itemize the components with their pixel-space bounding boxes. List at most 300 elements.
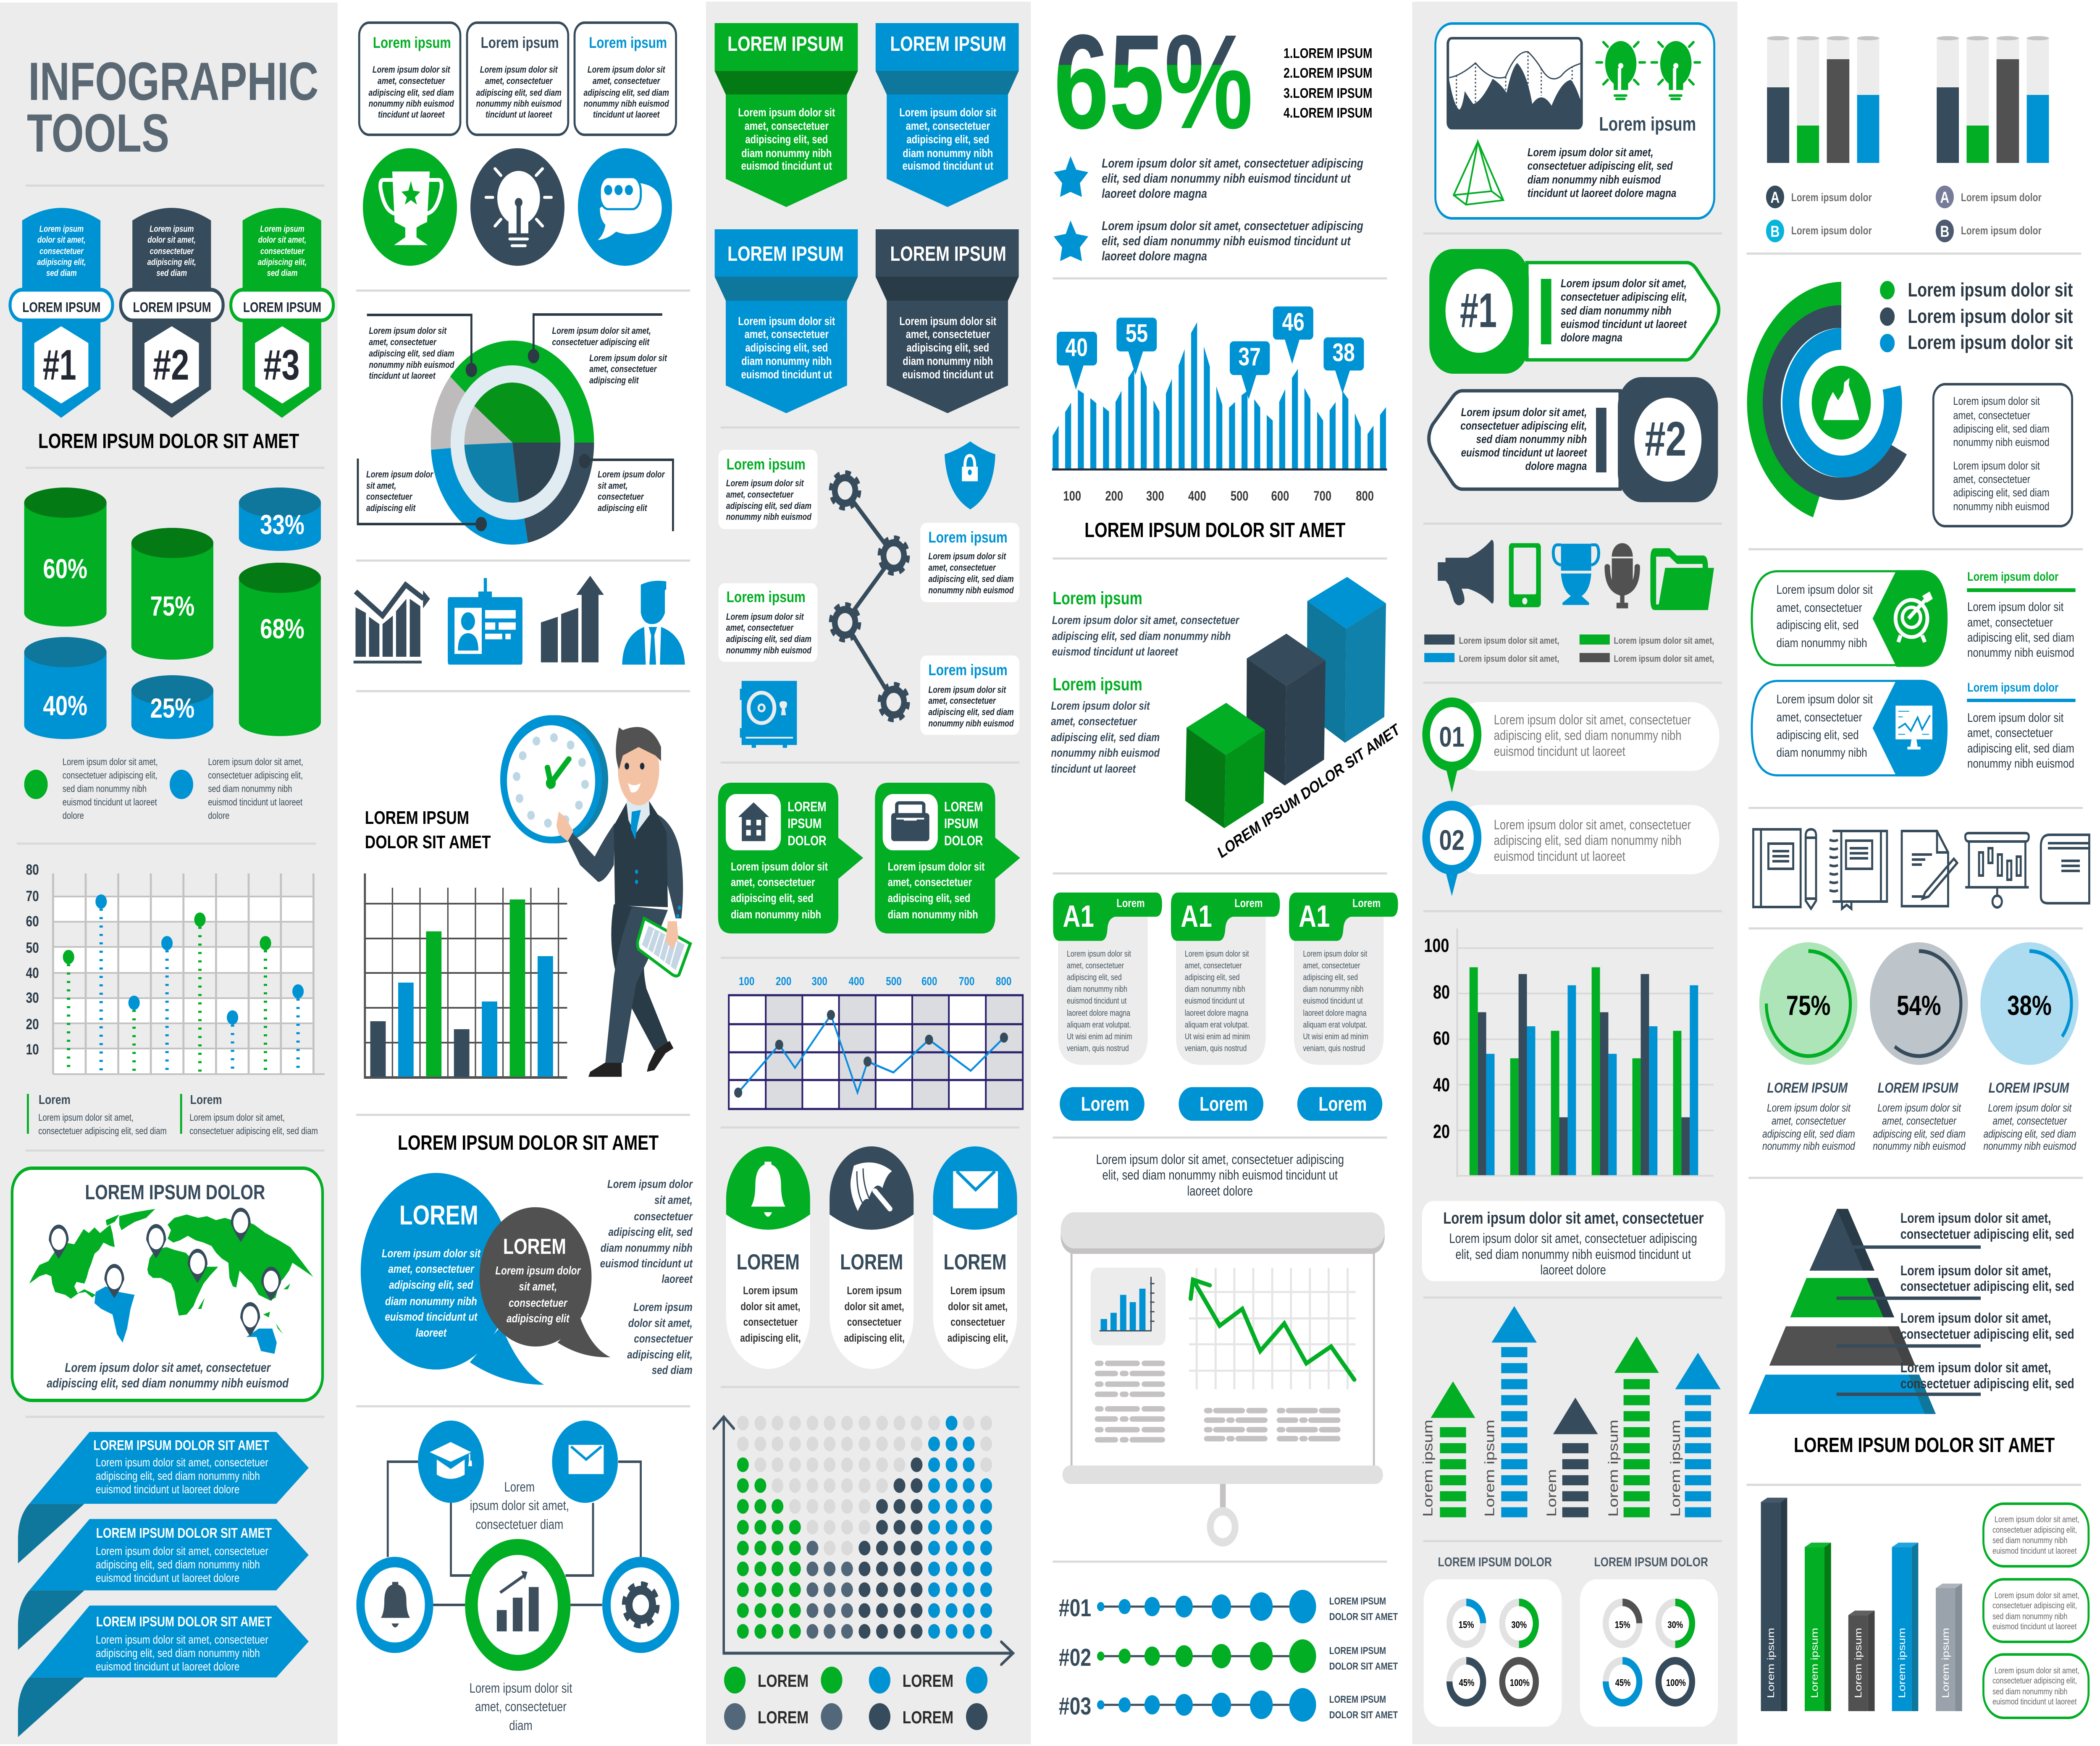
- progress gauges: 38%: [2007, 990, 2052, 1021]
- pin row 02: Lorem ipsum dolor sit amet, consectetuer: [1494, 818, 1691, 833]
- grouped bar chart: 80: [1433, 981, 1450, 1003]
- A1 cards: amet, consectetuer: [1303, 961, 1360, 970]
- heading: lorem ipsum dolor sit amet: DOLOR SIT AMET: [365, 832, 491, 852]
- A B legend: [1766, 186, 2042, 242]
- text blocks beside cubes: Lorem ipsum: [1053, 674, 1142, 695]
- cylinder legend: sed diam nonummy nibh: [208, 784, 292, 794]
- text box 1: tincidunt ut laoreet: [378, 110, 445, 120]
- chart legend: Lorem ipsum dolor sit amet,: [189, 1112, 285, 1123]
- speech bubbles: LOREM: [503, 1234, 566, 1258]
- gear process: amet, consectetuer: [928, 696, 996, 706]
- spike chart: 800: [1356, 489, 1374, 504]
- text box 1: adipiscing elit, sed diam: [369, 88, 454, 98]
- right-aligned text: adipiscing elit,: [627, 1348, 693, 1361]
- panel: world map: LOREM IPSUM DOLOR: [85, 1181, 265, 1204]
- ring gauges: 100%: [1666, 1678, 1686, 1688]
- line chart: [729, 975, 1023, 1109]
- gear process: Lorem ipsum: [727, 456, 806, 473]
- icon row legend: Lorem ipsum dolor sit amet,: [1614, 636, 1714, 646]
- green text pills: sed diam nonummy nibh: [1992, 1686, 2068, 1696]
- panel: mountains and bulbs: Lorem ipsum: [1599, 113, 1696, 135]
- 3d bar chart: [1761, 1498, 1962, 1711]
- target and monitor pills: amet, consectetuer: [1777, 710, 1862, 724]
- cylinder chart: [24, 488, 321, 739]
- stars and text: Lorem ipsum dolor sit amet, consectetuer adipiscing: [1102, 156, 1363, 170]
- speech bubbles: sit amet,: [519, 1280, 557, 1293]
- right-aligned text: dolor sit amet,: [628, 1317, 693, 1330]
- timeline dots: LOREM IPSUM: [1329, 1645, 1386, 1657]
- icon network: Lorem ipsum dolor sit: [470, 1681, 572, 1696]
- badge 3: Lorem ipsum: [260, 224, 304, 234]
- A1 cards: Lorem: [1200, 1093, 1248, 1115]
- badge 3: dolor sit amet,: [258, 235, 306, 245]
- A1 cards: amet, consectetuer: [1067, 961, 1124, 970]
- spike chart: 55: [1126, 319, 1148, 347]
- badge 2: adipiscing elit,: [147, 257, 196, 267]
- banners: amet, consectetuer: [745, 328, 829, 341]
- ring gauges: 30%: [1667, 1620, 1683, 1631]
- pyramid: consectetuer adipiscing elit, sed: [1900, 1376, 2074, 1392]
- text box 2: amet, consectetuer: [485, 76, 553, 87]
- pyramid: [1748, 1209, 2074, 1414]
- ribbon arrows: euismod tincidunt ut laoreet dolore: [96, 1572, 239, 1585]
- badge 1: [10, 208, 113, 418]
- pin row 01: adipiscing elit, sed diam nonummy nibh: [1494, 728, 1681, 743]
- icon network: Lorem: [504, 1480, 535, 1495]
- green callout cards: DOLOR: [788, 834, 827, 849]
- right-aligned text: Lorem ipsum: [633, 1301, 693, 1314]
- paragraph above screen: Lorem ipsum dolor sit amet, consectetuer adipiscing: [1096, 1152, 1344, 1167]
- cylinder chart: 33%: [260, 509, 304, 540]
- banners: LOREM IPSUM: [890, 243, 1006, 265]
- speech bubbles: amet, consectetuer: [388, 1263, 475, 1276]
- lollipop chart: 20: [26, 1016, 39, 1033]
- green callout cards: IPSUM: [944, 816, 978, 831]
- icon row: megaphone, phone, cup, mic, folder: [1438, 540, 1714, 610]
- spike chart: [1052, 307, 1387, 504]
- ribbon arrows: euismod tincidunt ut laoreet dolore: [96, 1483, 239, 1496]
- green text pills: euismod tincidunt ut laoreet: [1992, 1546, 2077, 1555]
- dot matrix legend: [724, 1667, 987, 1730]
- pyramid: consectetuer adipiscing elit, sed: [1900, 1327, 2074, 1342]
- line chart: 200: [776, 975, 791, 988]
- target and monitor pills: Lorem ipsum dolor sit: [1777, 582, 1873, 597]
- gear process: nonummy nibh euismod: [928, 718, 1014, 729]
- A1 cards: diam nonummy nibh: [1067, 984, 1127, 994]
- chart legend: consectetuer adipiscing elit, sed diam: [189, 1126, 318, 1137]
- banners: diam nonummy nibh: [903, 147, 993, 160]
- panel: column 1: [10, 51, 333, 1737]
- speech bubbles: LOREM: [399, 1201, 478, 1230]
- numbered list: 1.LOREM IPSUM: [1284, 46, 1372, 61]
- text box 3: amet, consectetuer: [593, 76, 660, 87]
- banners: amet, consectetuer: [745, 120, 829, 133]
- donut chart: amet, consectetuer: [589, 364, 657, 375]
- green text pills: [1983, 1504, 2089, 1718]
- lollipop chart: 40: [26, 965, 39, 981]
- stacked arrows: Lorem ipsum: [1482, 1420, 1497, 1517]
- target and monitor pills: diam nonummy nibh: [1777, 745, 1867, 760]
- green text pills: sed diam nonummy nibh: [1992, 1611, 2068, 1621]
- banners: adipiscing elit, sed: [906, 133, 989, 146]
- lollipop chart: [26, 861, 325, 1074]
- gear process: Lorem ipsum: [727, 588, 806, 606]
- badge 1: adipiscing elit,: [37, 257, 86, 267]
- panel: mountains and bulbs: Lorem ipsum dolor sit amet,: [1528, 146, 1654, 159]
- green callout cards: adipiscing elit, sed: [888, 892, 970, 905]
- right-aligned text: consectetuer: [634, 1210, 693, 1223]
- number card 2: dolore magna: [1525, 460, 1587, 473]
- spike chart: 400: [1188, 489, 1206, 504]
- A1 cards: Ut wisi enim ad minim: [1067, 1032, 1132, 1041]
- gear process: adipiscing elit, sed diam: [928, 707, 1014, 718]
- green text pills: consectetuer adipiscing elit,: [1992, 1600, 2077, 1610]
- A1 cards: aliquam erat volutpat.: [1185, 1020, 1249, 1029]
- pin row 01: [1422, 697, 1719, 793]
- grouped bar chart: 60: [1433, 1028, 1450, 1049]
- radial legend: [1880, 279, 2073, 353]
- gear process: amet, consectetuer: [726, 490, 794, 500]
- capsule cards: LOREM: [840, 1250, 903, 1274]
- outlined text box: nonummy nibh euismod: [1953, 436, 2050, 449]
- 3d cubes: [1185, 577, 1386, 828]
- text blocks beside cubes: Lorem ipsum dolor sit amet, consectetuer: [1052, 614, 1240, 627]
- gear process: Lorem ipsum dolor sit: [726, 612, 804, 622]
- outlined text box: Lorem ipsum dolor sit: [1953, 395, 2040, 408]
- target and monitor pills: diam nonummy nibh: [1777, 635, 1867, 650]
- badge 3: LOREM IPSUM: [243, 300, 321, 315]
- badge 2: consectetuer: [150, 246, 194, 257]
- donut chart: Lorem ipsum dolor sit amet,: [552, 326, 651, 336]
- ribbon arrows: adipiscing elit, sed diam nonummy nibh: [96, 1470, 260, 1483]
- number card 1: sed diam nonummy nibh: [1561, 304, 1672, 317]
- cylinder chart: 68%: [260, 613, 304, 644]
- stars and text: laoreet dolore magna: [1102, 249, 1207, 263]
- title: INFOGRAPHIC: [28, 51, 318, 112]
- text box 3: nonummy nibh euismod: [584, 99, 669, 109]
- A1 cards: Lorem: [1234, 897, 1263, 910]
- donut chart: tincidunt ut laoreet: [369, 371, 436, 381]
- banners: adipiscing elit, sed: [906, 341, 989, 354]
- number card 2: euismod tincidunt ut laoreet: [1461, 446, 1588, 459]
- right-aligned text: adipiscing elit, sed: [608, 1226, 693, 1239]
- banners: Lorem ipsum dolor sit: [738, 315, 835, 328]
- outlined text box: amet, consectetuer: [1953, 409, 2030, 422]
- text box 3: Lorem ipsum dolor sit: [588, 65, 666, 75]
- badge 1: consectetuer: [39, 246, 84, 257]
- text box 2: nonummy nibh euismod: [476, 99, 562, 109]
- paragraph above screen: elit, sed diam nonummy nibh euismod tincidunt ut: [1102, 1168, 1338, 1183]
- banners: diam nonummy nibh: [741, 147, 832, 160]
- dot matrix legend: LOREM: [903, 1672, 953, 1691]
- panel: world map: adipiscing elit, sed diam nonummy nibh euismod: [47, 1376, 289, 1390]
- spike chart: 500: [1231, 489, 1249, 504]
- speech bubbles: adipiscing elit: [507, 1312, 570, 1325]
- title: TOOLS: [27, 103, 169, 163]
- stacked arrows: Lorem: [1544, 1469, 1559, 1517]
- outlined text box: adipiscing elit, sed diam: [1953, 487, 2050, 499]
- stacked arrows: Lorem ipsum: [1420, 1420, 1435, 1517]
- projector screen: [1061, 1212, 1385, 1542]
- cylinder legend: sed diam nonummy nibh: [63, 784, 147, 794]
- line chart: 700: [959, 975, 974, 988]
- timeline dots: DOLOR SIT AMET: [1329, 1709, 1398, 1721]
- speech bubbles: euismod tincidunt ut: [385, 1311, 478, 1324]
- badge 2: sed diam: [156, 268, 187, 278]
- green text pills: Lorem ipsum dolor sit amet,: [1995, 1514, 2079, 1524]
- 3d bar chart: Lorem ipsum: [1765, 1628, 1776, 1698]
- side text blocks: Lorem ipsum dolor: [1967, 569, 2059, 584]
- A1 cards: Lorem: [1116, 897, 1145, 910]
- text box 2: adipiscing elit, sed diam: [476, 88, 562, 98]
- 3d bar chart: Lorem ipsum: [1809, 1628, 1820, 1698]
- line icon row: [1753, 829, 2089, 909]
- green callout cards: Lorem ipsum dolor sit: [731, 860, 828, 873]
- cylinder chart: 60%: [43, 553, 87, 584]
- cylinder legend: consectetuer adipiscing elit,: [63, 770, 158, 781]
- ribbon arrows: adipiscing elit, sed diam nonummy nibh: [96, 1647, 260, 1660]
- icon row: chart, id card, growth, person: [354, 576, 685, 665]
- panel: mountains and bulbs: diam nonummy nibh euismod: [1528, 173, 1661, 186]
- text blocks beside cubes: euismod tincidunt ut laoreet: [1052, 645, 1179, 658]
- speech bubbles: diam nonummy nibh: [385, 1295, 477, 1308]
- line chart: 400: [849, 975, 864, 988]
- number card 2: [1429, 377, 1718, 502]
- donut chart: consectetuer adipiscing elit: [552, 337, 650, 348]
- stars and text: [1054, 156, 1363, 263]
- A1 cards: diam nonummy nibh: [1185, 984, 1245, 994]
- green callout cards: diam nonummy nibh: [731, 908, 821, 921]
- timeline dots: DOLOR SIT AMET: [1329, 1611, 1398, 1623]
- badge 2: dolor sit amet,: [147, 235, 196, 245]
- panel: column 5: [1420, 24, 1725, 1727]
- caption card: Lorem ipsum dolor sit amet, consectetuer adipiscing: [1449, 1231, 1697, 1246]
- spike chart: 38: [1333, 338, 1355, 367]
- progress gauges: nonummy nibh euismod: [1873, 1140, 1966, 1152]
- pin row 02: 02: [1439, 824, 1465, 856]
- icon row legend: Lorem ipsum dolor sit amet,: [1459, 654, 1559, 664]
- A1 cards: laoreet dolore magna: [1067, 1008, 1131, 1017]
- spike chart: 37: [1239, 343, 1261, 371]
- numbered list: 4.LOREM IPSUM: [1284, 105, 1372, 121]
- caption card: [1422, 1201, 1725, 1281]
- progress gauges: amet, consectetuer: [1772, 1115, 1846, 1127]
- spike chart: 100: [1063, 489, 1081, 504]
- cylinder legend: euismod tincidunt ut laoreet: [63, 797, 157, 808]
- A1 cards: A1: [1181, 899, 1212, 934]
- progress gauges: Lorem ipsum dolor sit: [1767, 1102, 1851, 1114]
- text blocks beside cubes: amet, consectetuer: [1051, 715, 1137, 728]
- badge 3: adipiscing elit,: [258, 257, 307, 267]
- progress gauges: nonummy nibh euismod: [1983, 1140, 2076, 1152]
- icons: shield and safe: [740, 441, 995, 748]
- grid bar chart: [365, 873, 567, 1077]
- rotated label: LOREM IPSUM DOLOR SIT AMET: [1215, 720, 1402, 862]
- A1 cards: adipiscing elit, sed: [1303, 973, 1358, 982]
- icon network: ipsum dolor sit amet,: [470, 1498, 569, 1513]
- badge 3: sed diam: [267, 268, 297, 278]
- ribbon arrows: Lorem ipsum dolor sit amet, consectetuer: [96, 1456, 268, 1469]
- A1 cards: laoreet dolore magna: [1185, 1008, 1249, 1017]
- A1 cards: Lorem ipsum dolor sit: [1067, 949, 1131, 958]
- side text blocks: amet, consectetuer: [1967, 725, 2053, 740]
- text blocks beside cubes: [1051, 588, 1240, 776]
- ring gauges: 45%: [1459, 1678, 1474, 1688]
- speech bubbles: Lorem ipsum dolor sit: [382, 1247, 481, 1260]
- side text blocks: Lorem ipsum dolor: [1967, 680, 2059, 695]
- gear process: Lorem ipsum: [928, 661, 1008, 679]
- clock: [500, 715, 608, 843]
- chart legend: Lorem: [39, 1092, 71, 1107]
- green text pills: Lorem ipsum dolor sit amet,: [1995, 1590, 2079, 1600]
- timeline dots: #01: [1059, 1594, 1091, 1622]
- ring gauges: 15%: [1459, 1620, 1474, 1631]
- radial legend: Lorem ipsum dolor sit: [1908, 305, 2073, 327]
- radial arc chart: [1747, 282, 1907, 517]
- progress gauges: 75%: [1786, 990, 1830, 1021]
- number card 1: Lorem ipsum dolor sit amet,: [1561, 277, 1687, 290]
- A B legend: A: [1940, 189, 1949, 207]
- number card 2: Lorem ipsum dolor sit amet,: [1461, 406, 1587, 419]
- green text pills: consectetuer adipiscing elit,: [1992, 1675, 2077, 1685]
- target and monitor pills: adipiscing elit, sed: [1777, 617, 1859, 632]
- progress gauges: [1759, 942, 2079, 1152]
- green text pills: euismod tincidunt ut laoreet: [1992, 1621, 2077, 1631]
- capsule cards: Lorem ipsum: [743, 1285, 798, 1297]
- banners: adipiscing elit, sed: [745, 341, 828, 354]
- A1 cards: adipiscing elit, sed: [1185, 973, 1240, 982]
- A1 cards: veniam, quis nostrud: [1185, 1043, 1247, 1053]
- banners: LOREM IPSUM: [727, 33, 844, 55]
- icon row legend: Lorem ipsum dolor sit amet,: [1459, 636, 1559, 646]
- A1 cards: Lorem ipsum dolor sit: [1185, 949, 1249, 958]
- banners: euismod tincidunt ut: [741, 160, 832, 173]
- donut chart: adipiscing elit, sed diam: [369, 349, 454, 359]
- green callout cards: DOLOR: [944, 834, 983, 849]
- grouped bar chart: 100: [1424, 935, 1449, 956]
- progress gauges: Lorem ipsum dolor sit: [1877, 1102, 1961, 1114]
- badge 1: sed diam: [46, 268, 77, 278]
- progress gauges: adipiscing elit, sed diam: [1983, 1128, 2076, 1140]
- A1 cards: euismod tincidunt ut: [1067, 996, 1126, 1005]
- gear process: nonummy nibh euismod: [928, 585, 1014, 596]
- number card 2: #2: [1645, 412, 1686, 466]
- pyramid: consectetuer adipiscing elit, sed: [1900, 1227, 2074, 1242]
- capsule cards: LOREM: [737, 1250, 800, 1274]
- side text blocks: adipiscing elit, sed diam: [1967, 630, 2074, 645]
- chart legend: Lorem: [190, 1092, 222, 1107]
- speech bubbles: [361, 1173, 610, 1385]
- target and monitor pills: Lorem ipsum dolor sit: [1777, 692, 1873, 706]
- text blocks beside cubes: tincidunt ut laoreet: [1051, 763, 1136, 776]
- line chart: 100: [739, 975, 754, 988]
- caption card: elit, sed diam nonummy nibh euismod tincidunt ut: [1455, 1247, 1691, 1262]
- pin row 01: Lorem ipsum dolor sit amet, consectetuer: [1494, 713, 1691, 728]
- A1 cards: Ut wisi enim ad minim: [1185, 1032, 1250, 1041]
- green text pills: consectetuer adipiscing elit,: [1992, 1525, 2077, 1534]
- outlined text box: amet, consectetuer: [1953, 473, 2030, 486]
- panel: column 6: [1746, 36, 2089, 1718]
- text box 3: adipiscing elit, sed diam: [584, 88, 669, 98]
- text box 2: Lorem ipsum: [481, 34, 559, 52]
- donut chart: Lorem ipsum dolor: [598, 469, 665, 480]
- ribbon arrows: adipiscing elit, sed diam nonummy nibh: [96, 1558, 260, 1571]
- donut chart: [358, 315, 673, 545]
- donut chart: sit amet,: [366, 481, 396, 491]
- gear process: Lorem ipsum: [928, 529, 1008, 546]
- donut chart: Lorem ipsum dolor: [366, 469, 433, 480]
- cylinder legend: [24, 757, 303, 821]
- lollipop chart: 70: [26, 888, 39, 904]
- text box 2: Lorem ipsum dolor sit: [480, 65, 558, 75]
- outlined text box: adipiscing elit, sed diam: [1953, 423, 2050, 435]
- ribbon arrows: Lorem ipsum dolor sit amet, consectetuer: [96, 1545, 268, 1558]
- badge 2: [121, 208, 223, 418]
- speech bubbles: Lorem ipsum dolor: [495, 1264, 581, 1277]
- capsule cards: consectetuer: [743, 1316, 798, 1328]
- A1 cards: aliquam erat volutpat.: [1067, 1020, 1131, 1029]
- text box 1: amet, consectetuer: [378, 76, 445, 87]
- donut chart: sit amet,: [598, 481, 628, 491]
- cylinder chart: 40%: [43, 690, 87, 721]
- A B legend: B: [1770, 223, 1780, 241]
- side text blocks: amet, consectetuer: [1967, 615, 2053, 629]
- line chart: 800: [996, 975, 1011, 988]
- stars and text: Lorem ipsum dolor sit amet, consectetuer adipiscing: [1102, 218, 1363, 233]
- pyramid: consectetuer adipiscing elit, sed: [1900, 1279, 2074, 1294]
- capsule cards: adipiscing elit,: [740, 1332, 801, 1344]
- progress gauges: 54%: [1897, 990, 1941, 1021]
- banners: diam nonummy nibh: [903, 355, 993, 368]
- stars and text: laoreet dolore magna: [1102, 186, 1207, 201]
- line chart: 300: [812, 975, 827, 988]
- A B legend: B: [1940, 223, 1949, 241]
- badge 3: consectetuer: [260, 246, 305, 257]
- cylinder legend: Lorem ipsum dolor sit amet,: [208, 757, 303, 768]
- capsule cards: [726, 1146, 1017, 1369]
- side text blocks: adipiscing elit, sed diam: [1967, 741, 2074, 755]
- A1 cards: Lorem ipsum dolor sit: [1303, 949, 1367, 958]
- heading: LOREM IPSUM DOLOR SIT AMET: [38, 430, 299, 453]
- ring gauges: 100%: [1510, 1678, 1530, 1688]
- capsule cards: adipiscing elit,: [844, 1332, 905, 1344]
- icon network: diam: [509, 1718, 533, 1733]
- green callout cards: diam nonummy nibh: [888, 908, 978, 921]
- text box 1: nonummy nibh euismod: [369, 99, 454, 109]
- ribbon arrows: LOREM IPSUM DOLOR SIT AMET: [96, 1526, 272, 1541]
- badge 2: #2: [153, 341, 189, 389]
- side text blocks: Lorem ipsum dolor sit: [1967, 710, 2064, 725]
- text box 3: tincidunt ut laoreet: [593, 110, 660, 120]
- panel: mountains and bulbs: [1436, 24, 1714, 218]
- banners: Lorem ipsum dolor sit: [738, 106, 835, 119]
- progress gauges: Lorem ipsum dolor sit: [1988, 1102, 2072, 1114]
- badge 3: #3: [263, 341, 300, 389]
- icon network: [360, 1421, 675, 1733]
- right-aligned text: euismod tincidunt ut: [600, 1257, 693, 1270]
- A1 cards: A1: [1063, 899, 1094, 934]
- spike chart: 46: [1282, 308, 1305, 336]
- ring gauges: 45%: [1615, 1678, 1630, 1688]
- side text blocks: nonummy nibh euismod: [1967, 645, 2074, 660]
- text blocks beside cubes: adipiscing elit, sed diam: [1051, 731, 1160, 744]
- panel: mountains and bulbs: consectetuer adipiscing elit, sed: [1528, 160, 1673, 173]
- green callout cards: [718, 783, 1020, 933]
- capsule cards: LOREM: [944, 1250, 1007, 1274]
- stars and text: elit, sed diam nonummy nibh euismod tincidunt ut: [1102, 171, 1351, 186]
- ribbon arrows: euismod tincidunt ut laoreet dolore: [96, 1660, 239, 1673]
- spike chart: 200: [1105, 489, 1123, 504]
